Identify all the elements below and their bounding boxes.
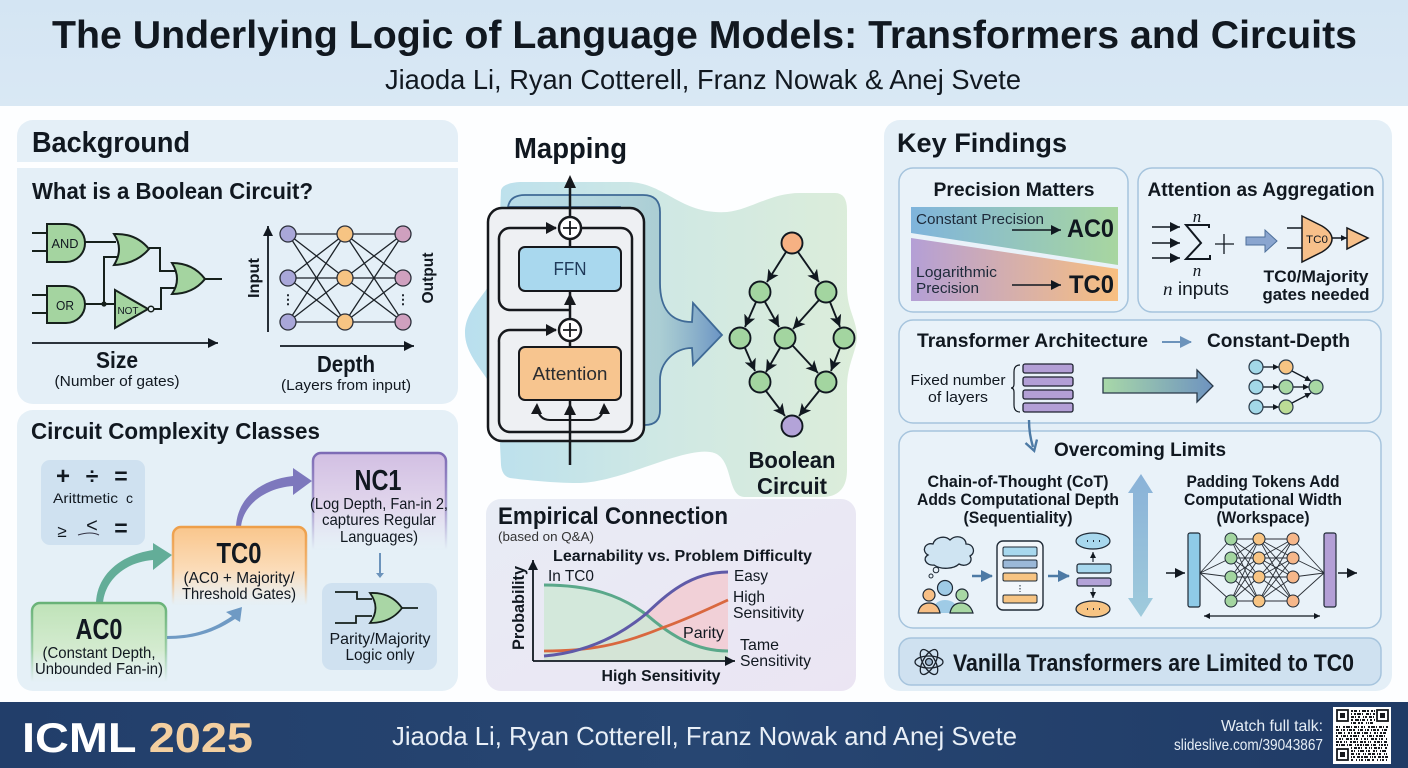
class box: NC1: NC1 (354, 465, 402, 497)
class box: AC0: Unbounded Fan-in) (35, 661, 163, 678)
card: transformer architecture: of layers (928, 389, 988, 406)
parity logic box: Logic only (346, 647, 414, 664)
card: attention as aggregation: n (1193, 207, 1201, 226)
icon: people thinking (918, 537, 973, 613)
logic gates diagram: NOT (118, 305, 139, 317)
neural network depth diagram: Input (246, 257, 263, 298)
card: overcoming limits: (Sequentiality) (964, 509, 1072, 527)
note: based on Q&A: (based on Q&A) (498, 529, 594, 544)
card: precision matters: Constant Precision (916, 211, 1044, 228)
card: precision matters (899, 168, 1128, 312)
neural network depth diagram: ⋮ (282, 292, 294, 307)
card: overcoming limits: Chain-of-Thought (CoT) (928, 473, 1108, 491)
class box: TC0: Threshold Gates) (182, 586, 296, 603)
line chart: Probability (509, 565, 528, 650)
arithmetic box: c (126, 490, 133, 506)
parity logic box: Parity/Majority (330, 631, 430, 648)
card: overcoming limits: (Workspace) (1216, 509, 1310, 527)
size arrow and label (32, 343, 218, 390)
card: transformer architecture: Constant-Depth (1207, 330, 1350, 352)
big mapping arrow (508, 195, 722, 425)
card: precision matters: AC0 (1067, 215, 1114, 243)
title: The Underlying Logic of Language Models: Transformers and Circuits (52, 14, 1357, 57)
arithmetic box: < (86, 515, 98, 537)
boolean circuit graph: Circuit (757, 473, 827, 499)
boolean circuit graph: Boolean (748, 447, 836, 473)
line chart: Tame (740, 637, 779, 654)
line chart: Parity (683, 625, 724, 642)
panel: circuit complexity classes (17, 410, 458, 691)
FFN block (519, 247, 621, 291)
card: attention as aggregation: TC0/Majority (1264, 267, 1369, 286)
talk link (1174, 718, 1323, 754)
heading: mapping: Mapping (514, 133, 627, 165)
QR code (1333, 707, 1391, 764)
card: precision matters: Precision (916, 280, 979, 297)
callout: vanilla transformers: Vanilla Transformers are Limited to TC0 (953, 650, 1354, 677)
logic gates diagram: AND (52, 236, 78, 251)
icon: chain steps document (997, 541, 1043, 610)
panel: key findings (884, 120, 1392, 691)
arithmetic box: = (114, 463, 128, 489)
class box: AC0 (32, 603, 166, 682)
card: transformer architecture: Fixed number (910, 372, 1006, 389)
parity logic box (322, 583, 437, 670)
heading: boolean circuit: What is a Boolean Circuit? (32, 178, 313, 204)
callout: vanilla transformers (899, 638, 1381, 685)
heading: key findings: Key Findings (897, 128, 1067, 158)
arithmetic box (41, 460, 145, 545)
card: transformer architecture (899, 320, 1381, 423)
neural network depth diagram: Depth (317, 351, 375, 377)
panel: empirical connection (486, 499, 856, 691)
card: overcoming limits: Computational Width (1184, 491, 1342, 509)
footer band (0, 702, 1408, 768)
size arrow and label: (Number of gates) (54, 373, 180, 390)
class box: TC0 (173, 527, 306, 605)
arrow: architecture to limits (1029, 420, 1033, 447)
line chart: High Sensitivity (602, 668, 721, 685)
card: precision matters: TC0 (1069, 271, 1114, 299)
line chart: In TC0 (548, 568, 594, 585)
arithmetic box: + (56, 463, 70, 490)
chart title: Learnability vs. Problem Difficulty (553, 548, 812, 565)
footer authors: Jiaoda Li, Ryan Cotterell, Franz Nowak and Anej Svete (392, 721, 1017, 751)
double-headed arrow (1128, 474, 1153, 617)
class box: NC1 (310, 453, 448, 550)
padding neural network (1166, 533, 1357, 616)
card: precision matters: Logarithmic (916, 264, 998, 281)
heading: empirical connection: Empirical Connection (498, 503, 728, 530)
attention block (519, 347, 621, 400)
arithmetic box: ≥ (57, 522, 67, 541)
arrow: steps to output (1048, 575, 1069, 577)
header band (0, 0, 1408, 106)
card: attention as aggregation: Attention as Aggregation (1148, 180, 1374, 201)
line chart: High (733, 589, 765, 606)
neural network depth diagram: (Layers from input) (281, 377, 411, 394)
add nodes (559, 217, 581, 341)
icon: output stack (1076, 533, 1111, 617)
card: overcoming limits (899, 431, 1381, 628)
card: attention as aggregation: n (1193, 261, 1201, 280)
class box: TC0: TC0 (216, 538, 262, 570)
logic gates diagram (32, 224, 222, 328)
arithmetic box: ÷ (86, 463, 99, 489)
line chart (509, 560, 811, 685)
arrow: AC0 to TC0 (96, 543, 172, 603)
arrow: people to steps (972, 575, 992, 577)
line chart: Sensitivity (740, 653, 811, 670)
card: attention as aggregation (1138, 168, 1383, 312)
mapping background blob (465, 182, 857, 497)
card: precision matters: Precision Matters (934, 180, 1094, 201)
card: overcoming limits: Padding Tokens Add (1186, 473, 1340, 491)
transformer block (488, 175, 644, 465)
conference logo: ICML 2025 (22, 714, 253, 761)
card: overcoming limits: Overcoming Limits (1054, 439, 1226, 461)
class box: NC1: Languages) (340, 529, 418, 546)
arrow: TC0 to NC1 (236, 468, 312, 527)
card: attention as aggregation: TC0 (1306, 234, 1328, 246)
boolean circuit graph (730, 232, 854, 499)
FFN block: FFN (554, 259, 586, 279)
neural network depth diagram (246, 226, 437, 394)
arrow: AC0 to TC0 thin (167, 607, 242, 639)
panel: mapping (465, 133, 857, 499)
card: attention as aggregation: gates needed (1262, 285, 1370, 304)
arrow: NC1 to parity (376, 553, 384, 578)
arithmetic box: Arittmetic (53, 490, 118, 506)
neural network depth diagram: ⋮ (396, 292, 410, 307)
talk link: slideslive.com/39043867 (1174, 737, 1323, 754)
panel: background (17, 120, 458, 404)
line chart: Sensitivity (733, 605, 804, 622)
authors: Jiaoda Li, Ryan Cotterell, Franz Nowak & Anej Svete (385, 64, 1021, 95)
arithmetic box: = (114, 515, 128, 541)
heading: background: Background (32, 127, 190, 159)
talk link: Watch full talk: (1221, 718, 1323, 735)
class box: NC1: (Log Depth, Fan-in 2, (310, 496, 448, 513)
class box: AC0: AC0 (76, 614, 122, 646)
line chart: Easy (734, 568, 768, 585)
card: overcoming limits: Adds Computational Depth (917, 491, 1119, 509)
class box: NC1: captures Regular (322, 512, 437, 529)
class box: TC0: (AC0 + Majority/ (184, 570, 295, 587)
card: transformer architecture: Transformer Architecture (917, 330, 1148, 352)
neural network depth diagram: Output (420, 252, 437, 304)
card: attention as aggregation: n inputs (1163, 279, 1229, 299)
icon: atom (915, 647, 943, 677)
size arrow and label: Size (96, 347, 138, 373)
heading: complexity classes: Circuit Complexity Classes (31, 418, 320, 444)
logic gates diagram: OR (56, 298, 74, 313)
attention block: Attention (532, 364, 608, 384)
class box: AC0: (Constant Depth, (42, 645, 156, 662)
